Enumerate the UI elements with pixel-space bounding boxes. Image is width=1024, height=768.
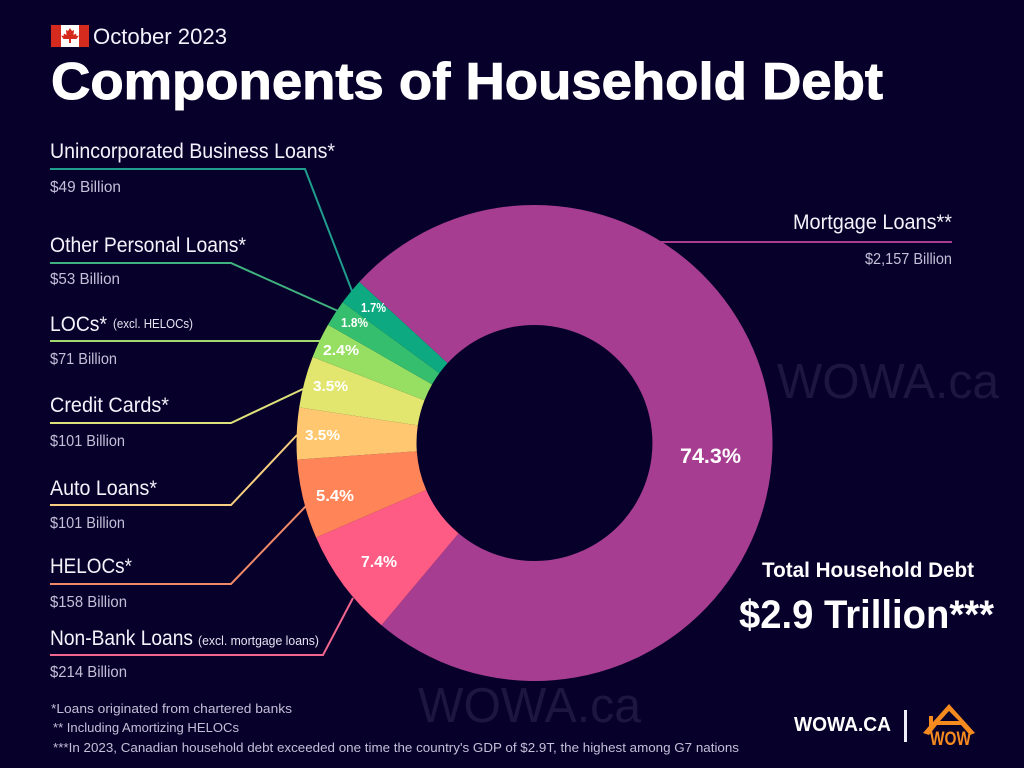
percentage: 3.5% auto: 3.5%	[305, 427, 340, 444]
segment: HELOCs	[297, 451, 426, 538]
icon: WOW house logo	[923, 704, 975, 750]
title: Components of Household Debt	[51, 53, 883, 111]
logo text: WOWA.CA	[794, 714, 891, 736]
callout: mortgage loans: Mortgage Loans**	[793, 211, 952, 234]
percentage: 1.8%: 1.8%	[341, 316, 368, 330]
callout: non-bank loans: (excl. mortgage loans)	[198, 633, 319, 648]
footnotes: ** Including Amortizing HELOCs	[53, 720, 239, 735]
callout: non-bank loans	[50, 598, 353, 681]
total household debt label: Total Household Debt	[762, 559, 974, 582]
callout: unincorporated business loans: Unincorporated Business Loans*	[50, 140, 335, 163]
segment: auto loans	[297, 407, 418, 460]
callout: credit cards: $101 Billion	[50, 433, 125, 450]
callout: other personal loans: $53 Billion	[50, 271, 120, 288]
callout: HELOCs	[50, 506, 306, 611]
donut chart	[297, 205, 772, 681]
callout: auto loans: Auto Loans*	[50, 477, 157, 500]
footnotes: ***In 2023, Canadian household debt exceeded one time the country's GDP of $2.9T, the highest among G7 nations	[53, 740, 740, 755]
date heading: October 2023	[93, 24, 227, 49]
callout: non-bank loans: Non-Bank Loans	[50, 627, 193, 650]
percentage: 74.3%: 74.3%	[680, 445, 741, 468]
callout: credit cards	[50, 389, 303, 450]
callout: non-bank loans: $214 Billion	[50, 664, 127, 681]
segment: other personal loans	[328, 302, 439, 384]
callout: LOCs: LOCs*	[50, 313, 107, 336]
icon: Canadian flag	[51, 25, 89, 47]
callout: auto loans	[50, 435, 297, 532]
percentage: 1.7%: 1.7%	[361, 301, 386, 315]
callout: mortgage loans	[655, 211, 952, 268]
segment: non-bank loans	[316, 490, 459, 625]
percentage: 5.4%: 5.4%	[316, 488, 354, 505]
callout: other personal loans: Other Personal Loans*	[50, 234, 246, 257]
segment: credit cards	[299, 357, 424, 425]
icon: WOW house logo: WOW	[930, 729, 971, 750]
callout: unincorporated business loans	[50, 140, 352, 291]
callout: credit cards: Credit Cards*	[50, 394, 169, 417]
callout: unincorporated business loans: $49 Billion	[50, 179, 121, 196]
callout: LOCs: (excl. HELOCs)	[113, 317, 193, 331]
callout: mortgage loans: $2,157 Billion	[865, 251, 952, 268]
callout: HELOCs: $158 Billion	[50, 594, 127, 611]
callout: LOCs	[50, 313, 320, 368]
percentage: 2.4%: 2.4%	[323, 342, 359, 359]
footnotes	[51, 701, 740, 755]
segment: mortgage loans	[359, 205, 772, 681]
watermark: bottom centre: WOWA.ca	[418, 679, 642, 733]
segment: unincorporated business loans	[343, 282, 448, 373]
total household debt value: $2.9 Trillion***	[739, 593, 994, 637]
percentage: 7.4%: 7.4%	[361, 554, 397, 571]
callout: auto loans: $101 Billion	[50, 515, 125, 532]
logo divider	[904, 710, 907, 742]
watermark: upper right: WOWA.ca	[777, 355, 1000, 409]
segment: LOCs	[313, 325, 432, 400]
footnotes: *Loans originated from chartered banks	[51, 701, 293, 716]
percentage: 3.5% credit: 3.5%	[313, 378, 348, 395]
callout: HELOCs: HELOCs*	[50, 555, 132, 578]
callout: other personal loans	[50, 234, 338, 311]
callout: LOCs: $71 Billion	[50, 351, 117, 368]
